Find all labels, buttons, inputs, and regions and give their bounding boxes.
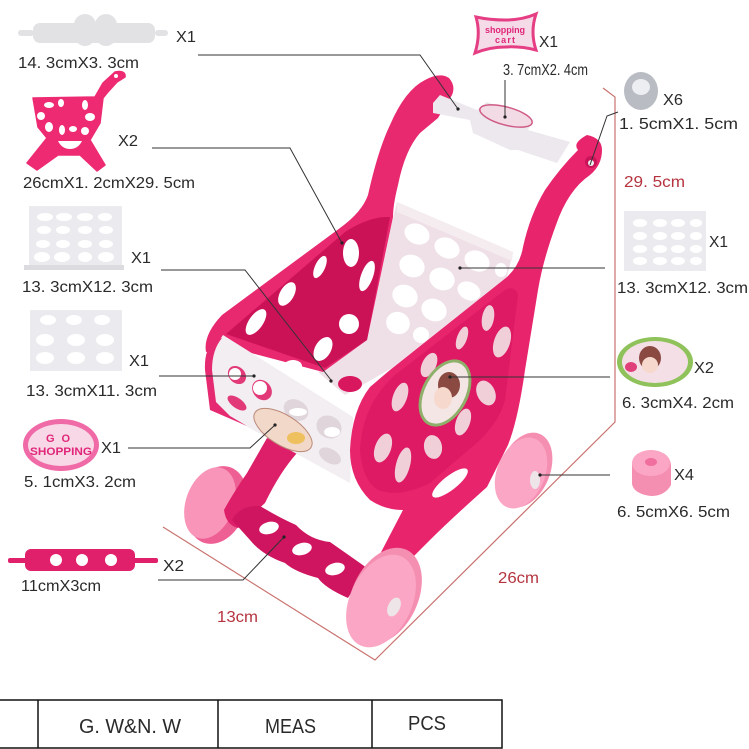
label: X1	[709, 234, 728, 251]
label: X1	[129, 353, 149, 370]
part: front panel: 13. 3cmX11. 3cm	[26, 383, 157, 400]
part: cross bar	[8, 549, 184, 595]
label: X2	[118, 133, 138, 150]
part: wheel	[617, 450, 730, 521]
label: X1	[176, 29, 196, 46]
label: X2	[694, 360, 714, 377]
spec table: G. W&N. W	[79, 716, 181, 738]
near side panel and handle	[350, 135, 602, 563]
part: wheel: 6. 5cmX6. 5cm	[617, 504, 730, 521]
part: side panel	[23, 72, 195, 192]
part: handle bar: 14. 3cmX3. 3cm	[18, 55, 139, 72]
label: X6	[663, 92, 683, 109]
callout lines	[128, 55, 618, 580]
part: shopping cart sticker: cart	[495, 35, 515, 45]
handle sticker	[478, 100, 534, 132]
part: shopping cart sticker: shopping	[485, 25, 525, 35]
label: X1	[539, 34, 558, 51]
part: front panel	[26, 310, 157, 400]
label: X4	[674, 467, 694, 484]
side wheel	[485, 424, 563, 516]
back left wheel	[175, 457, 258, 553]
part: back panel	[22, 206, 153, 296]
part: back panel: 13. 3cmX12. 3cm	[22, 279, 153, 296]
front wheel	[332, 536, 436, 659]
back inner panel	[318, 202, 513, 395]
front white panel	[205, 335, 353, 483]
label: X1	[101, 440, 121, 457]
part: shopping cart sticker: 3. 7cmX2. 4cm	[503, 62, 588, 79]
far side panel and handle	[206, 75, 453, 372]
part: bolt cap	[619, 72, 738, 133]
front leg	[224, 438, 297, 528]
height dimension: 29. 5cm	[624, 174, 685, 191]
part: girl sticker	[617, 337, 734, 412]
girl medallion	[408, 350, 482, 436]
spec table: MEAS	[265, 716, 316, 738]
spec table: PCS	[408, 713, 446, 735]
part: cross bar: 11cmX3cm	[21, 578, 101, 595]
label: X2	[163, 558, 184, 575]
part: handle bar	[18, 14, 196, 72]
part: go shopping sticker: GO	[46, 433, 70, 445]
width dimension: 13cm	[217, 609, 258, 626]
part: side panel: 26cmX1. 2cmX29. 5cm	[23, 175, 195, 192]
shopping cart	[175, 75, 602, 659]
dimension lines	[163, 88, 615, 660]
part: right panel	[617, 211, 748, 297]
go shopping sticker	[247, 400, 319, 460]
handle bar	[433, 95, 570, 163]
cross bar	[232, 506, 367, 598]
part: bolt cap: 1. 5cmX1. 5cm	[619, 116, 738, 133]
part: shopping cart sticker	[475, 14, 588, 79]
part: go shopping sticker	[23, 419, 136, 491]
spec table	[0, 700, 502, 748]
part: girl sticker: 6. 3cmX4. 2cm	[622, 395, 734, 412]
part: right panel: 13. 3cmX12. 3cm	[617, 280, 748, 297]
part: go shopping sticker: SHOPPING	[30, 446, 92, 458]
depth dimension: 26cm	[498, 570, 539, 587]
part: go shopping sticker: 5. 1cmX3. 2cm	[24, 474, 136, 491]
label: X1	[131, 250, 151, 267]
